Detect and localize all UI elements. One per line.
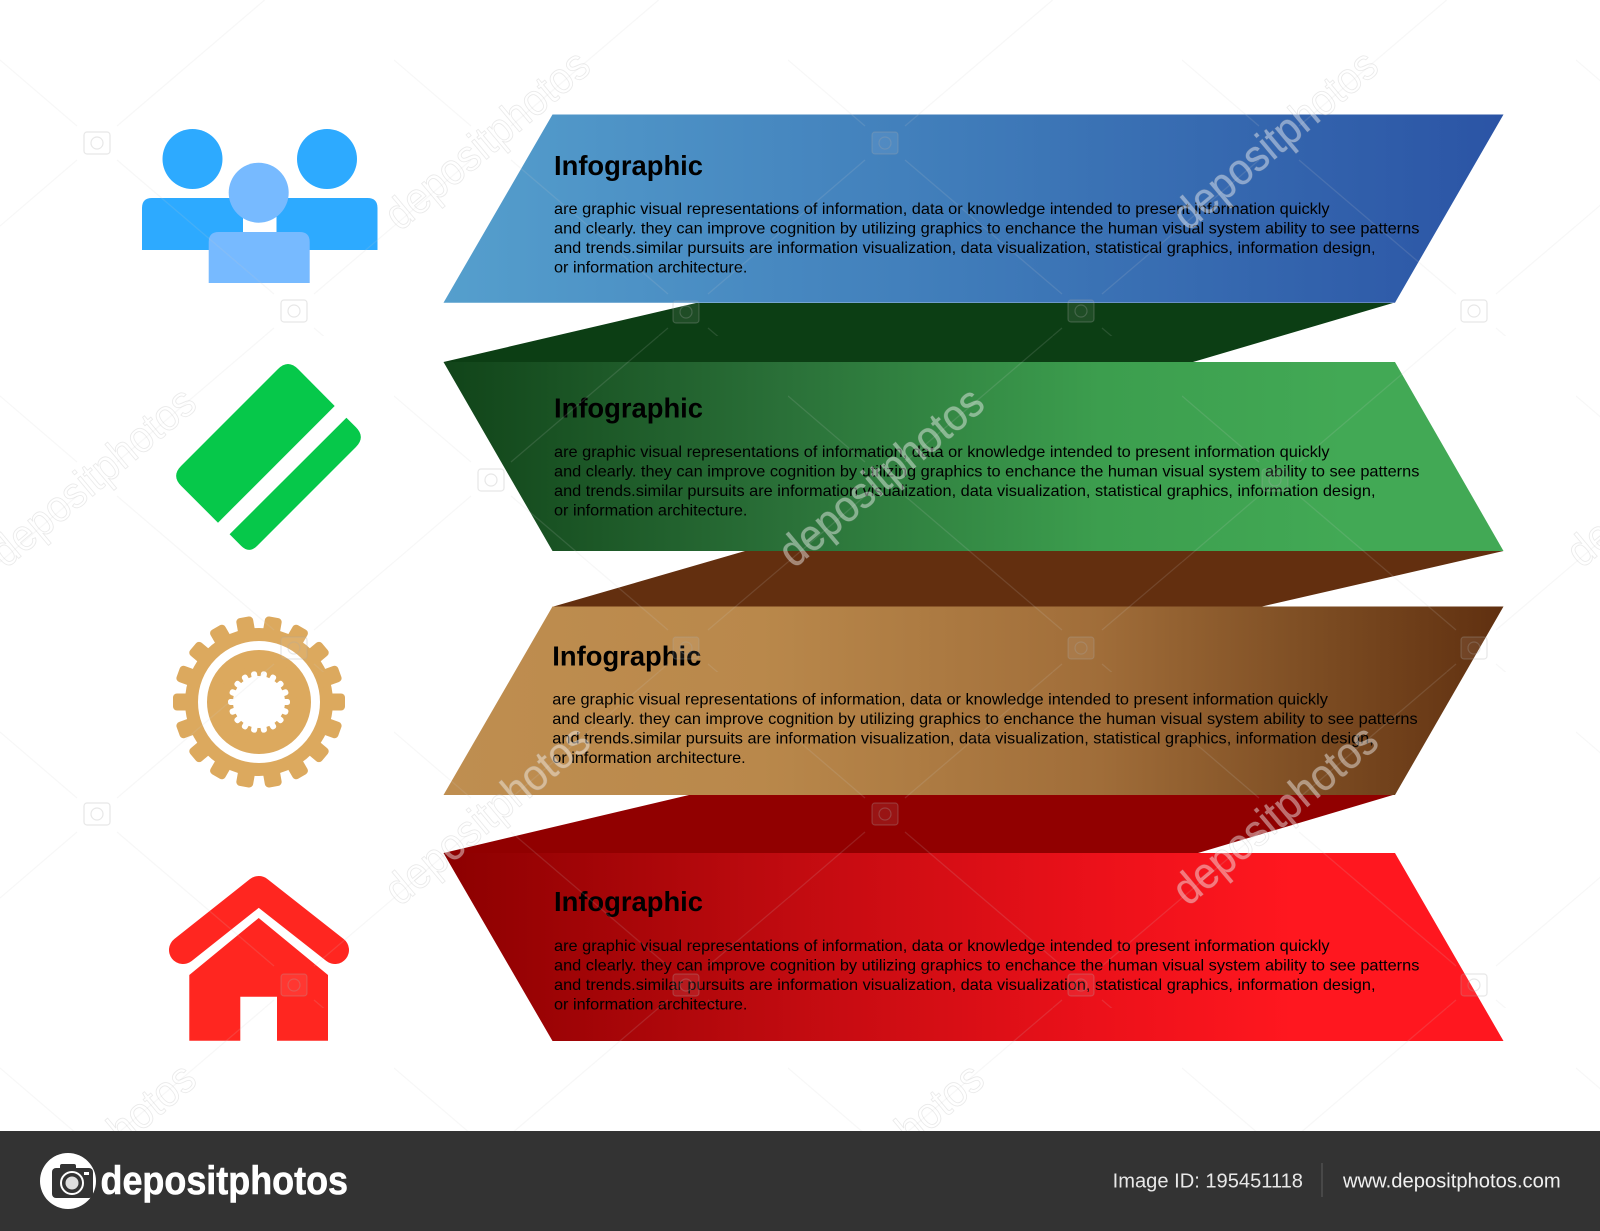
body text: and clearly. they can improve cognition by utilizing graphics to enchance the human visual system ability to see patterns xyxy=(554,464,1420,480)
body text xyxy=(552,691,1418,767)
band shape xyxy=(444,606,1504,795)
band fold shadow xyxy=(444,303,1393,362)
body text: are graphic visual representations of information, data or knowledge intended to present information quickly xyxy=(554,444,1330,461)
body text: and trends.similar pursuits are information visualization, data visualization, statistical graphics, information design, xyxy=(554,977,1376,994)
roof xyxy=(183,890,335,950)
body text: and clearly. they can improve cognition by utilizing graphics to enchance the human visual system ability to see patterns xyxy=(554,958,1420,974)
panel: brown band xyxy=(444,551,1504,795)
body text: are graphic visual representations of information, data or knowledge intended to present information quickly xyxy=(554,938,1330,955)
body text: or information architecture. xyxy=(554,997,747,1014)
icon: house xyxy=(183,890,335,1041)
body text xyxy=(554,444,1420,520)
watermark text overlay: depositphotos xyxy=(375,715,599,915)
band shape xyxy=(444,114,1504,303)
house body xyxy=(189,918,328,1041)
icon: credit card xyxy=(176,364,361,550)
website url: www.depositphotos.com xyxy=(1342,1171,1561,1193)
icon: people group xyxy=(142,129,378,283)
heading: Infographic xyxy=(554,392,703,423)
icon: gear xyxy=(173,616,345,788)
panel: green band xyxy=(444,303,1504,551)
body text: and trends.similar pursuits are information visualization, data visualization, statistical graphics, information design, xyxy=(554,483,1376,500)
watermark text overlay: depositphotos xyxy=(1163,715,1387,915)
body text: or information architecture. xyxy=(552,750,746,767)
logo wordmark: depositphotos xyxy=(100,1159,348,1203)
body text: and trends.similar pursuits are information visualization, data visualization, statistical graphics, information design, xyxy=(554,240,1376,257)
body text: are graphic visual representations of information, data or knowledge intended to present information quickly xyxy=(552,691,1328,708)
body text xyxy=(554,201,1420,277)
band fold shadow xyxy=(554,551,1504,606)
band fold shadow xyxy=(444,795,1393,853)
body text: and clearly. they can improve cognition by utilizing graphics to enchance the human visual system ability to see patterns xyxy=(554,220,1420,238)
body text xyxy=(554,938,1420,1014)
image id: Image ID: 195451118 xyxy=(1113,1171,1303,1193)
centre person xyxy=(209,163,310,283)
left person xyxy=(142,129,243,250)
watermark text overlay: depositphotos xyxy=(769,377,993,577)
panel: red band xyxy=(444,795,1504,1041)
right person xyxy=(276,129,378,250)
body text: and clearly. they can improve cognition by utilizing graphics to enchance the human visual system ability to see patterns xyxy=(552,711,1418,728)
band shape xyxy=(444,853,1504,1041)
icon: camera logo xyxy=(40,1153,96,1209)
heading: Infographic xyxy=(552,640,701,671)
watermark text overlay: depositphotos xyxy=(1163,40,1387,240)
body text: or information architecture. xyxy=(554,260,747,277)
body text: and trends.similar pursuits are information visualization, data visualization, statistical graphics, information design, xyxy=(552,730,1374,747)
footer bar xyxy=(0,1131,1600,1231)
heading: Infographic xyxy=(554,886,703,917)
heading: Infographic xyxy=(554,150,703,181)
panel: blue band xyxy=(444,114,1504,303)
watermark text overlay: depositphotos xyxy=(375,40,599,240)
body text: are graphic visual representations of information, data or knowledge intended to present information quickly xyxy=(554,201,1330,218)
body text: or information architecture. xyxy=(554,503,747,520)
band shape xyxy=(444,362,1504,551)
